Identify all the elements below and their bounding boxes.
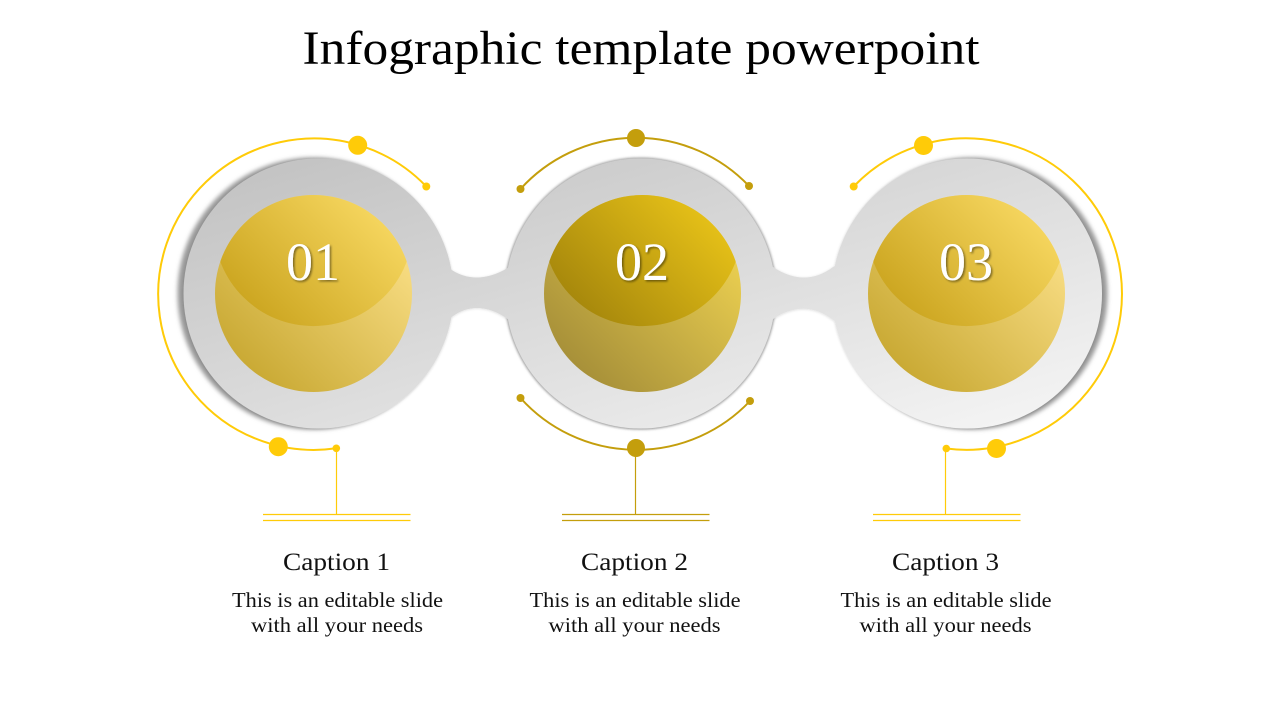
disc shadows [178,158,1108,430]
panel: step 02 [544,195,741,392]
caption block 3: Caption 3 [892,547,999,576]
caption block 2: Caption 2 [581,547,688,576]
number 01: 01 [286,232,340,292]
caption block 3: with all your needs [860,613,1032,637]
gray disc chain [184,158,1102,428]
caption block 3: This is an editable slide [840,588,1052,612]
panel: step 03 [868,195,1065,392]
yellow circle 02 [544,195,741,392]
yellow circle 03 [868,195,1065,392]
caption block 2 [530,547,740,637]
title: Infographic template powerpoint [302,22,980,75]
number 02: 02 [615,232,669,292]
caption block 3 [840,547,1052,637]
caption block 1: Caption 1 [283,547,390,576]
panel: linked gray discs [178,158,1108,430]
number 03: 03 [939,232,993,292]
caption block 2: This is an editable slide [530,588,740,612]
orbit arc 1 with dots [158,136,430,456]
connector 3 [873,450,1020,520]
orbit arcs 2 with dots [516,129,754,457]
caption block 2: with all your needs [548,613,720,637]
caption block 1 [232,547,443,637]
orbit arc 3 with dots [850,136,1122,458]
caption block 1: with all your needs [251,613,423,637]
caption block 1: This is an editable slide [232,588,443,612]
panel: step 01 [215,195,412,392]
connector 1 [263,450,410,520]
yellow circle 01 [215,195,412,392]
connector 2 [562,450,710,520]
